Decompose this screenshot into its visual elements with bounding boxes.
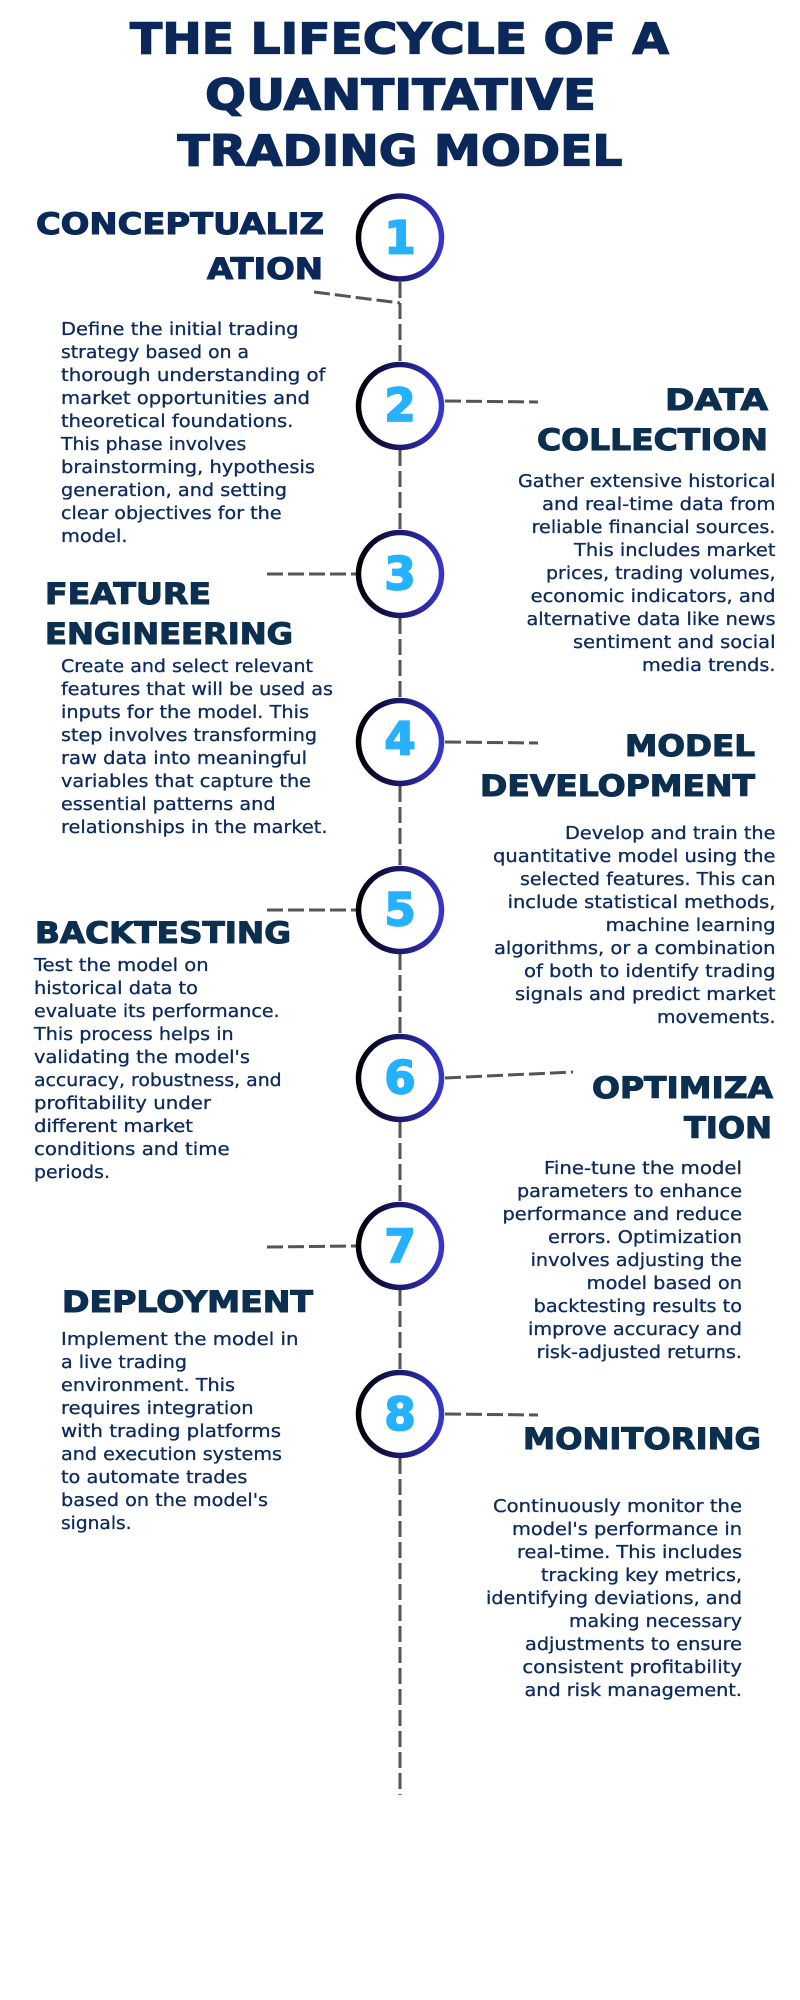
title: QUANTITATIVE <box>205 70 596 120</box>
step badge 7 <box>358 1204 442 1288</box>
text: optimization description: parameters to enhance <box>517 1182 742 1202</box>
connector 2 <box>445 401 538 402</box>
connector 3 <box>267 572 356 576</box>
heading: backtesting: BACKTESTING <box>35 916 291 950</box>
text: conceptualization description: market opportunities and <box>61 389 310 409</box>
text: feature engineering description: variables that capture the <box>61 772 311 792</box>
text: monitoring description: real-time. This includes <box>517 1543 742 1563</box>
text: deployment description: and execution systems <box>61 1445 282 1465</box>
text: feature engineering description: inputs for the model. This <box>61 703 309 723</box>
heading: conceptualization: CONCEPTUALIZ <box>36 207 324 241</box>
text: optimization description: errors. Optimization <box>548 1228 742 1248</box>
text: optimization description: backtesting results to <box>534 1297 742 1317</box>
text: feature engineering description: features that will be used as <box>61 680 333 700</box>
title: THE LIFECYCLE OF A <box>130 14 670 64</box>
text: monitoring description: adjustments to ensure <box>525 1635 742 1655</box>
text: backtesting description: evaluate its performance. <box>34 1002 280 1022</box>
panel: optimization <box>502 1071 773 1363</box>
heading: optimization: TION <box>684 1111 772 1145</box>
step badge 7: 7 <box>384 1220 416 1273</box>
text: data collection description: Gather extensive historical <box>518 472 776 492</box>
heading: data collection <box>537 383 768 457</box>
text: model development description: Develop and train the <box>565 824 776 844</box>
text: conceptualization description: strategy based on a <box>61 343 249 363</box>
text: model development description: quantitative model using the <box>493 847 776 867</box>
text: model development description: movements. <box>657 1008 776 1028</box>
heading: data collection: COLLECTION <box>537 423 768 457</box>
text: deployment description <box>61 1330 298 1534</box>
step badge 3: 3 <box>384 548 416 600</box>
text: conceptualization description: Define the initial trading <box>61 320 298 340</box>
connector 1 <box>314 292 400 303</box>
heading: deployment: DEPLOYMENT <box>62 1285 313 1319</box>
connector 6 <box>445 1072 573 1078</box>
heading: conceptualization <box>36 207 324 286</box>
step badge 1 <box>358 196 442 279</box>
text: feature engineering description: essential patterns and <box>61 795 276 815</box>
text: backtesting description: This process helps in <box>33 1025 234 1045</box>
heading: optimization <box>592 1071 773 1145</box>
text: conceptualization description: brainstorming, hypothesis <box>61 458 315 478</box>
text: deployment description: a live trading <box>61 1353 187 1373</box>
text: deployment description: signals. <box>61 1514 132 1534</box>
title: TRADING MODEL <box>178 127 622 177</box>
text: data collection description: This includes market <box>573 541 776 561</box>
panel: feature engineering <box>45 577 333 838</box>
step badge 4 <box>358 700 442 784</box>
text: optimization description <box>502 1159 742 1363</box>
text: backtesting description: validating the model's <box>34 1048 250 1068</box>
text: data collection description: alternative data like news <box>526 610 776 630</box>
step badge 8 <box>358 1372 442 1456</box>
step badge 5: 5 <box>384 884 416 936</box>
text: conceptualization description: theoretical foundations. <box>61 412 293 432</box>
text: backtesting description: accuracy, robustness, and <box>34 1071 282 1091</box>
step badge 3 <box>358 532 442 616</box>
heading: model development: DEVELOPMENT <box>480 769 755 803</box>
heading: model development: MODEL <box>625 729 755 763</box>
step badge 1: 1 <box>384 212 416 264</box>
text: monitoring description: making necessary <box>569 1612 742 1632</box>
text: conceptualization description: thorough understanding of <box>61 366 326 386</box>
text: model development description: selected features. This can <box>520 870 776 890</box>
text: backtesting description: profitability under <box>34 1094 212 1114</box>
text: feature engineering description: step involves transforming <box>61 726 317 746</box>
step badge 5 <box>358 868 442 952</box>
text: data collection description <box>518 472 776 676</box>
text: backtesting description: different market <box>34 1117 193 1137</box>
connector 5 <box>267 908 356 912</box>
text: conceptualization description: model. <box>61 527 128 547</box>
panel: data collection <box>518 383 776 676</box>
text: conceptualization description: clear objectives for the <box>61 504 282 524</box>
text: backtesting description <box>33 956 282 1183</box>
text: optimization description: Fine-tune the model <box>544 1159 742 1179</box>
text: data collection description: prices, trading volumes, <box>546 564 776 584</box>
text: feature engineering description: Create and select relevant <box>61 657 313 677</box>
text: data collection description: reliable financial sources. <box>532 518 776 538</box>
step badge 8: 8 <box>384 1388 416 1441</box>
text: model development description: algorithms, or a combination <box>494 939 776 959</box>
text: conceptualization description <box>60 320 326 547</box>
heading: data collection: DATA <box>665 383 768 417</box>
text: monitoring description: identifying deviations, and <box>486 1589 742 1609</box>
text: optimization description: model based on <box>587 1274 742 1294</box>
text: deployment description: to automate trades <box>61 1468 247 1488</box>
heading: feature engineering: FEATURE <box>45 577 211 611</box>
text: model development description <box>493 824 776 1028</box>
text: model development description: include statistical methods, <box>508 893 776 913</box>
step badge 2 <box>358 364 442 448</box>
text: optimization description: risk-adjusted returns. <box>537 1343 742 1363</box>
step badge 6: 6 <box>384 1052 416 1104</box>
text: deployment description: environment. This <box>61 1376 235 1396</box>
text: data collection description: economic indicators, and <box>531 587 776 607</box>
connector 7 <box>267 1246 356 1247</box>
text: data collection description: sentiment and social <box>573 633 776 653</box>
text: monitoring description <box>486 1497 742 1701</box>
heading: optimization: OPTIMIZA <box>592 1071 773 1105</box>
heading: feature engineering <box>45 577 293 651</box>
timeline spine <box>398 282 402 1795</box>
text: feature engineering description <box>61 657 333 838</box>
heading: model development <box>480 729 755 803</box>
panel: conceptualization <box>36 207 326 547</box>
title <box>130 14 670 177</box>
connector 8 <box>445 1414 538 1415</box>
text: model development description: of both to identify trading <box>524 962 776 982</box>
heading: conceptualization: ATION <box>207 252 323 286</box>
text: deployment description: Implement the model in <box>61 1330 298 1350</box>
text: data collection description: and real-time data from <box>542 495 776 515</box>
text: monitoring description: tracking key metrics, <box>541 1566 742 1586</box>
text: model development description: machine learning <box>606 916 776 936</box>
text: optimization description: improve accuracy and <box>528 1320 742 1340</box>
text: monitoring description: model's performance in <box>512 1520 742 1540</box>
text: monitoring description: Continuously monitor the <box>493 1497 742 1517</box>
panel: deployment <box>61 1285 313 1534</box>
heading: feature engineering: ENGINEERING <box>45 617 293 651</box>
panel: monitoring <box>486 1422 761 1701</box>
text: backtesting description: conditions and time <box>34 1140 230 1160</box>
step badge 2: 2 <box>384 379 416 432</box>
text: deployment description: with trading platforms <box>61 1422 281 1442</box>
text: backtesting description: historical data to <box>34 979 198 999</box>
text: deployment description: requires integration <box>61 1399 254 1419</box>
heading: monitoring: MONITORING <box>523 1422 761 1456</box>
step badge 4: 4 <box>384 712 416 766</box>
text: data collection description: media trends. <box>642 656 776 676</box>
text: conceptualization description: generation, and setting <box>61 481 287 501</box>
text: model development description: signals and predict market <box>515 985 776 1005</box>
step badge 6 <box>358 1036 442 1120</box>
panel: backtesting <box>33 916 291 1183</box>
text: optimization description: involves adjusting the <box>531 1251 742 1271</box>
connector 4 <box>445 742 538 743</box>
text: feature engineering description: relationships in the market. <box>61 818 328 838</box>
text: backtesting description: periods. <box>34 1163 110 1183</box>
text: backtesting description: Test the model on <box>33 956 209 976</box>
text: monitoring description: consistent profitability <box>522 1658 742 1678</box>
text: conceptualization description: This phase involves <box>60 435 246 455</box>
text: optimization description: performance and reduce <box>502 1205 742 1225</box>
text: deployment description: based on the model's <box>61 1491 268 1511</box>
text: monitoring description: and risk management. <box>524 1681 742 1701</box>
text: feature engineering description: raw data into meaningful <box>61 749 307 769</box>
panel: model development <box>480 729 776 1028</box>
